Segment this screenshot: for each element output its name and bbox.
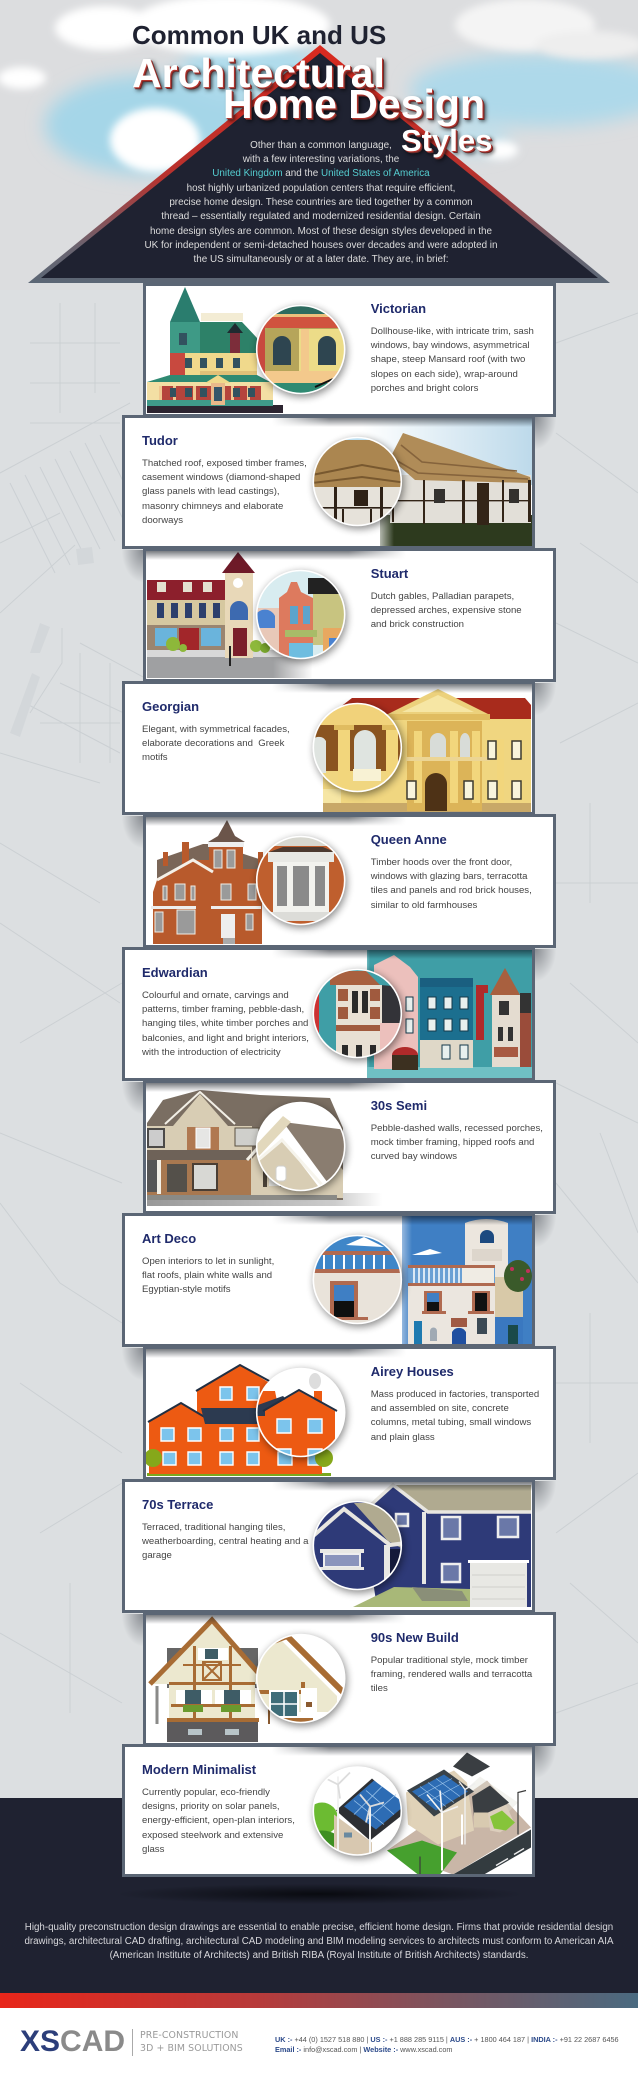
- heading: Modern Minimalist: Modern Minimalist: [142, 1762, 256, 1777]
- illustration: Edwardian terrace: [308, 950, 532, 1078]
- description: Art Deco: flat roofs, plain white walls and: [142, 1270, 272, 1281]
- description: Victorian: slopes on each side), wrap-around: [371, 369, 518, 380]
- heading: Tudor: Tudor: [142, 433, 178, 448]
- description: Edwardian: Colourful and ornate, carvings and: [142, 990, 289, 1001]
- heading: Airey Houses: Airey Houses: [371, 1364, 454, 1379]
- icon: magnifier detail: [312, 967, 404, 1065]
- illustration: Tudor house: [308, 418, 532, 546]
- intro text: home design styles are common. Most of these design styles developed in the: [150, 226, 492, 237]
- icon: magnifier detail: [312, 1499, 407, 1594]
- illustration: 30s Semi house: [147, 1090, 374, 1206]
- shadow under last panel: [120, 1884, 520, 1904]
- description: Victorian: Dollhouse-like, with intricate trim, sash: [371, 326, 534, 337]
- description: Stuart: depressed arches, expensive stone: [371, 605, 522, 616]
- panel: Georgian: [122, 681, 535, 815]
- description: Tudor: Thatched roof, exposed timber frames,: [142, 458, 307, 469]
- closing text: [24, 1922, 614, 1961]
- panel: 90s New Build: [143, 1612, 556, 1746]
- description: Edwardian: [142, 990, 309, 1058]
- description: 30s Semi: curved bay windows: [371, 1151, 457, 1162]
- description: 30s Semi: mock timber framing, hipped roofs and: [371, 1137, 534, 1148]
- icon: magnifier detail: [253, 568, 353, 668]
- tagline: [140, 2030, 243, 2054]
- description: Airey Houses: columns, metal tubing, small windows: [371, 1417, 531, 1428]
- description: Edwardian: hanging tiles, white timber porches and: [142, 1018, 308, 1029]
- house roof: [28, 45, 610, 283]
- contact details: Email :- info@xscad.com | Website :- www.xscad.com: [275, 2045, 452, 2054]
- heading: Victorian: Victorian: [371, 301, 426, 316]
- title: [132, 20, 497, 162]
- description: Tudor: doorways: [142, 515, 183, 526]
- intro text: United Kingdom and the United States of America: [212, 168, 430, 179]
- description: Airey Houses: and plain glass: [371, 1432, 435, 1443]
- description: 90s New Build: tiles: [371, 1683, 388, 1694]
- panel: Modern Minimalist: [122, 1744, 535, 1877]
- closing text: drawings, architectural CAD drafting, architectural CAD modeling and BIM modeling services to architects must conform to American AIA: [24, 1936, 614, 1947]
- intro text: host highly urbanized population centers that require efficient,: [187, 183, 455, 194]
- description: Victorian: porches and bright colors: [371, 383, 478, 394]
- description: 90s New Build: [370, 1655, 532, 1694]
- description: Art Deco: Egyptian-style motifs: [142, 1284, 231, 1295]
- description: Edwardian: patterns, timber framing, pebble-dash,: [142, 1004, 304, 1015]
- heading: Edwardian: Edwardian: [142, 965, 208, 980]
- heading: Queen Anne: Queen Anne: [371, 832, 447, 847]
- icon: magnifier detail: [302, 1764, 408, 1864]
- title line: Styles: Styles: [401, 123, 492, 158]
- panel: Tudor: [122, 415, 535, 549]
- description: Modern Minimalist: glass: [142, 1844, 164, 1855]
- title line: Architectural: Architectural: [132, 50, 385, 96]
- description: 70s Terrace: garage: [142, 1550, 172, 1561]
- description: Georgian: [142, 724, 290, 763]
- panel: Victorian: [143, 283, 556, 417]
- description: 30s Semi: Pebble-dashed walls, recessed porches,: [371, 1123, 543, 1134]
- logo: XSCAD: XSCAD: [20, 2025, 125, 2058]
- description: Stuart: and brick construction: [371, 619, 464, 630]
- description: Airey Houses: Mass produced in factories, transported: [371, 1389, 539, 1400]
- description: Modern Minimalist: energy-efficient, open-plan interiors,: [142, 1815, 295, 1826]
- icon: magnifier detail: [253, 1366, 353, 1463]
- intro text: UK for independent or semi-detached houses over decades and were adopted in: [144, 240, 498, 251]
- intro text: precise home design. These countries are tied together by a common: [169, 197, 473, 208]
- description: Victorian: shape, steep Mansard roof (with two: [371, 354, 525, 365]
- intro text: with a few interesting variations, the: [243, 154, 399, 165]
- description: Stuart: [371, 591, 522, 630]
- description: 70s Terrace: weatherboarding, central heating and a: [142, 1536, 308, 1547]
- icon: magnifier detail: [253, 303, 359, 403]
- panel: footer dark band: [0, 1798, 638, 1993]
- panel: Stuart: [143, 548, 556, 682]
- description: Queen Anne: similar to old farmhouses: [371, 900, 477, 911]
- description: Queen Anne: Timber hoods over the front door,: [371, 857, 512, 868]
- description: Edwardian: balconies, and light and bright interiors,: [142, 1033, 309, 1044]
- description: Victorian: windows, bay windows, asymmetrical: [371, 340, 530, 351]
- panel: 70s Terrace: [122, 1479, 535, 1613]
- intro text: [144, 140, 498, 265]
- panel: Airey Houses: [143, 1346, 556, 1480]
- description: Modern Minimalist: exposed steelwork and extensive: [142, 1830, 283, 1841]
- intro text: thread – essentially regulated and modernized residential design. Certain: [161, 211, 481, 222]
- icon: magnifier detail: [253, 1100, 353, 1195]
- description: Georgian: elaborate decorations and Greek: [142, 738, 284, 749]
- description: 90s New Build: framing, rendered walls and terracotta: [371, 1669, 532, 1680]
- description: Tudor: [142, 458, 307, 526]
- icon: magnifier detail: [312, 701, 404, 796]
- description: Airey Houses: [371, 1389, 539, 1443]
- description: 90s New Build: Popular traditional style, mock timber: [371, 1655, 528, 1666]
- illustration: 70s Terrace house: [308, 1483, 531, 1607]
- illustration: Victorian house: [147, 287, 352, 413]
- illustration: Modern Minimalist eco house: [308, 1752, 531, 1874]
- description: Queen Anne: tiles and panels and rod brick houses,: [371, 885, 532, 896]
- panel: Art Deco: [122, 1213, 535, 1347]
- closing text: (American Institute of Architects) and British RIBA (Royal Institute of British Architects) standards.: [110, 1950, 528, 1961]
- closing text: High-quality preconstruction design drawings are essential to enable precise, efficient home design. Firms that provide residential design: [25, 1922, 613, 1933]
- heading: 90s New Build: 90s New Build: [371, 1630, 459, 1645]
- description: Modern Minimalist: [142, 1787, 295, 1855]
- illustration: 90s New Build house: [148, 1616, 352, 1742]
- heading: 70s Terrace: 70s Terrace: [142, 1497, 213, 1512]
- description: Airey Houses: and assembled on site, concrete: [371, 1403, 509, 1414]
- heading: Stuart: Stuart: [371, 566, 408, 581]
- description: Victorian: [370, 326, 534, 394]
- panel: Queen Anne: [143, 814, 556, 948]
- illustration: Queen Anne house: [151, 820, 352, 944]
- background: blueprint linework: [0, 303, 638, 1714]
- title line: Common UK and US: Common UK and US: [132, 20, 386, 50]
- gradient stripe: [0, 1993, 638, 2008]
- icon: magnifier detail: [253, 834, 353, 929]
- illustration: Airey Houses: [146, 1364, 352, 1476]
- background: sky and clouds: [0, 0, 638, 184]
- panel: 30s Semi: [143, 1080, 556, 1214]
- description: Tudor: casement windows (diamond-shaped: [142, 472, 300, 483]
- intro text: Other than a common language,: [250, 140, 392, 151]
- description: Art Deco: Open interiors to let in sunlight,: [142, 1256, 274, 1267]
- heading: Georgian: Georgian: [142, 699, 199, 714]
- description: Tudor: glass panels with lead castings),: [142, 486, 280, 497]
- title line: Home Design: Home Design: [223, 81, 485, 127]
- panel: Edwardian: [122, 947, 535, 1081]
- illustration: Stuart street: [147, 552, 352, 678]
- tagline: 3D + BIM SOLUTIONS: [140, 2043, 243, 2054]
- description: Stuart: Dutch gables, Palladian parapets,: [371, 591, 514, 602]
- description: Edwardian: with the introduction of electricity: [142, 1047, 281, 1058]
- heading: 30s Semi: 30s Semi: [371, 1098, 427, 1113]
- footer: [0, 2008, 638, 2074]
- description: Modern Minimalist: Currently popular, eco-friendly: [142, 1787, 270, 1798]
- icon: magnifier detail: [253, 1632, 353, 1727]
- description: Tudor: masonry chimneys and elaborate: [142, 501, 283, 512]
- illustration: Georgian house: [308, 689, 531, 812]
- description: 30s Semi: [371, 1123, 543, 1162]
- contact details: [275, 2035, 619, 2054]
- description: Queen Anne: [370, 857, 532, 911]
- icon: magnifier detail: [312, 1233, 404, 1328]
- description: 70s Terrace: Terraced, traditional hanging tiles,: [142, 1522, 285, 1533]
- description: 70s Terrace: [142, 1522, 308, 1561]
- description: Queen Anne: windows with glazing bars, terracotta: [371, 871, 527, 882]
- description: Georgian: motifs: [142, 752, 168, 763]
- divider: [132, 2029, 133, 2056]
- icon: magnifier detail: [312, 435, 407, 532]
- contact details: UK :- +44 (0) 1527 518 880 | US :- +1 888 285 9115 | AUS :- + 1800 464 187 | INDIA :- +91 22 2687 6456: [275, 2035, 619, 2044]
- intro text: the US simultaneously or at a later date. They are, in brief:: [193, 254, 449, 265]
- description: Georgian: Elegant, with symmetrical facades,: [142, 724, 290, 735]
- illustration: Art Deco house: [308, 1216, 532, 1344]
- description: Art Deco: [142, 1256, 274, 1295]
- tagline: PRE-CONSTRUCTION: [140, 2030, 238, 2041]
- heading: Art Deco: Art Deco: [142, 1231, 196, 1246]
- description: Modern Minimalist: designs, priority on solar panels,: [142, 1801, 280, 1812]
